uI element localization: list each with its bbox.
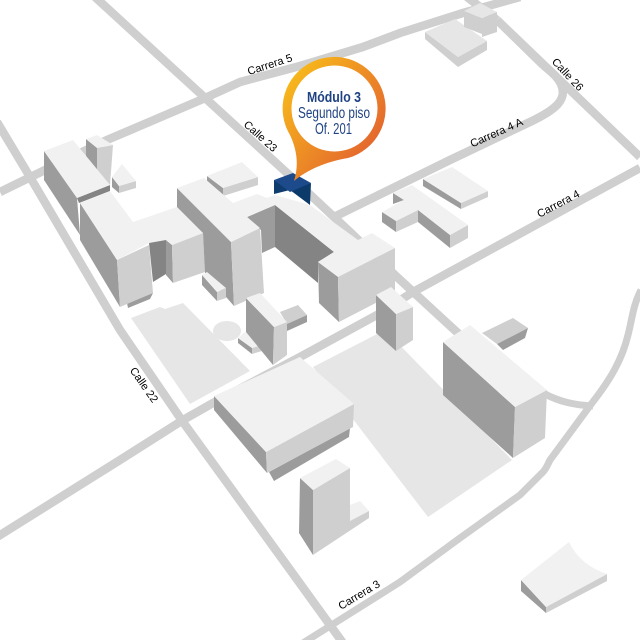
flat area: left lot xyxy=(131,303,250,404)
pin text: Of. 201: Of. 201 xyxy=(315,121,352,138)
building: far northeast cube xyxy=(464,3,497,37)
building: flat north block xyxy=(207,162,258,196)
label: Carrera 4: Carrera 4 xyxy=(535,188,582,221)
flat area: central lot xyxy=(313,330,512,517)
building: long west block xyxy=(44,140,110,235)
building: large south block xyxy=(214,357,354,481)
building: J wing xyxy=(280,305,307,331)
pin shape xyxy=(283,57,386,181)
building: southeast corner block xyxy=(521,542,607,613)
street labels xyxy=(127,52,585,613)
label: Carrera 5: Carrera 5 xyxy=(246,52,294,78)
label: Carrera 4 A: Carrera 4 A xyxy=(469,116,526,150)
building: central tall block xyxy=(177,178,275,306)
building: east wing annex xyxy=(482,318,528,350)
highlighted building: Módulo 3 xyxy=(274,173,311,205)
building: long east wing with end block xyxy=(275,195,395,322)
pin text: Módulo 3: Módulo 3 xyxy=(307,89,361,106)
building: south tower xyxy=(299,459,369,555)
location pin callout xyxy=(283,57,386,181)
building: small block by plaza xyxy=(238,332,262,354)
building: T-shaped block xyxy=(382,185,468,248)
building: small tower northwest xyxy=(86,135,113,185)
building: J tower xyxy=(246,293,287,365)
label: Carrera 3: Carrera 3 xyxy=(336,578,382,613)
label: Calle 22: Calle 22 xyxy=(127,365,160,405)
building: far northeast flat block xyxy=(425,19,487,67)
pin text: Segundo piso: Segundo piso xyxy=(298,105,370,122)
label: Calle 26: Calle 26 xyxy=(549,56,585,94)
pin inner circle xyxy=(292,66,378,152)
building: large east block xyxy=(443,325,547,458)
building: tower east of center xyxy=(376,287,413,351)
building: L-shaped west block xyxy=(80,191,205,308)
building: small block south of center xyxy=(202,272,226,301)
building: small northwest annex xyxy=(112,164,136,193)
building: flat northeast block xyxy=(423,167,488,209)
label: Calle 23: Calle 23 xyxy=(241,119,279,155)
flat area: plaza circle xyxy=(213,321,241,341)
